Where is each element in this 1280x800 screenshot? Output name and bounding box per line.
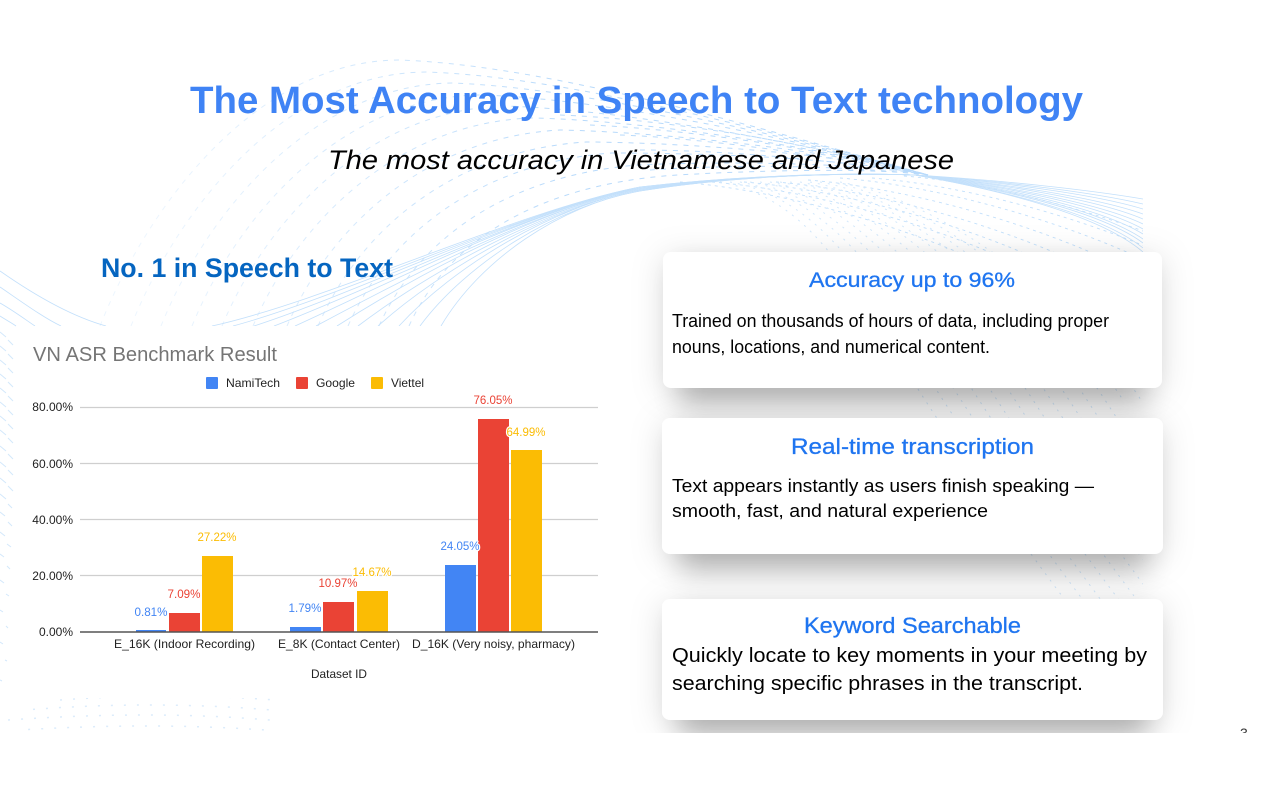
page number: 3	[1240, 725, 1248, 741]
card: accuracy	[663, 252, 1162, 406]
data labels: 76.05%	[474, 393, 513, 407]
chart title: VN ASR Benchmark Result	[33, 344, 277, 366]
chart legend: NamiTech	[226, 376, 280, 390]
subtitle: The most accuracy in Vietnamese and Japanese	[328, 145, 954, 175]
chart legend: Google	[316, 376, 355, 390]
gridlines and y axis labels: 40.00%	[32, 513, 73, 527]
data labels: 64.99%	[506, 425, 546, 439]
card body: Trained on thousands of hours of data, including proper	[672, 311, 1109, 331]
card: keyword	[662, 599, 1163, 738]
chart legend: Viettel	[391, 376, 424, 390]
card body: nouns, locations, and numerical content.	[672, 337, 990, 357]
card heading: Accuracy up to 96%	[809, 269, 1015, 292]
data labels: 14.67%	[352, 565, 392, 579]
card: real-time	[662, 418, 1163, 572]
gridlines and y axis labels: 60.00%	[32, 457, 73, 471]
gridlines and y axis labels	[32, 400, 598, 639]
bars: Google	[169, 419, 509, 632]
card body: smooth, fast, and natural experience	[672, 501, 988, 521]
data labels: 10.97%	[318, 576, 358, 590]
card body	[672, 476, 1094, 521]
chart legend	[206, 377, 424, 390]
chart white backdrop	[34, 326, 442, 698]
gridlines and y axis labels: 20.00%	[32, 569, 73, 583]
data labels: 24.05%	[440, 539, 480, 553]
data labels: 27.22%	[198, 530, 237, 544]
bar chart: VN ASR benchmark	[32, 344, 598, 681]
card heading: Real-time transcription	[791, 434, 1034, 459]
x axis labels: Dataset ID	[311, 667, 367, 681]
x axis labels: E_8K (Contact Center)	[278, 637, 400, 651]
card body: Text appears instantly as users finish speaking —	[672, 476, 1094, 496]
bars: Viettel	[202, 450, 542, 632]
card body	[672, 645, 1147, 695]
section heading: No. 1 in Speech to Text	[101, 253, 393, 283]
gridlines and y axis labels: 80.00%	[32, 400, 73, 414]
card body: Quickly locate to key moments in your meeting by	[672, 645, 1147, 667]
data labels: 7.09%	[168, 587, 201, 601]
card body: searching specific phrases in the transcript.	[672, 673, 1083, 695]
card body	[672, 311, 1109, 357]
bars: NamiTech	[136, 565, 476, 632]
title: The Most Accuracy in Speech to Text technology	[190, 80, 1083, 122]
data labels	[134, 393, 546, 619]
card heading: Keyword Searchable	[804, 613, 1021, 638]
data labels: 0.81%	[134, 605, 168, 619]
data labels: 1.79%	[288, 601, 322, 615]
x axis labels: E_16K (Indoor Recording)	[114, 637, 255, 651]
x axis labels	[115, 640, 574, 678]
gridlines and y axis labels: 0.00%	[39, 625, 73, 639]
x axis labels: D_16K (Very noisy, pharmacy)	[412, 637, 575, 651]
